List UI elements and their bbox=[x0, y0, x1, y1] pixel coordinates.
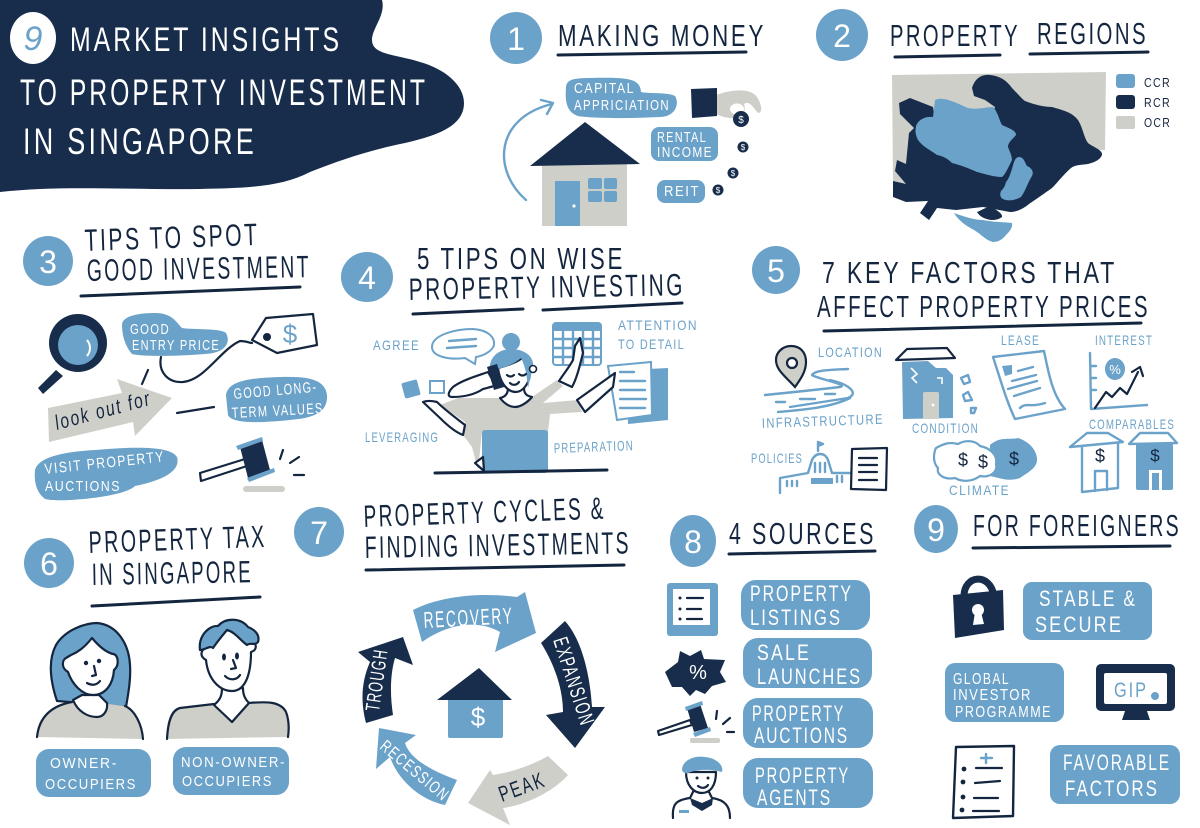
bubble: non-owner-occupiers bbox=[173, 747, 289, 795]
arrow: recession: RECESSION bbox=[376, 737, 453, 805]
money clouds: $ bbox=[958, 450, 968, 470]
panel 9: for foreigners bbox=[914, 505, 1181, 818]
panel 1: making money bbox=[490, 12, 766, 226]
badge 4: 4 bbox=[358, 260, 376, 296]
crumbling building bbox=[896, 348, 979, 436]
comparable houses bbox=[1070, 416, 1177, 492]
heading: tips to spot bbox=[81, 217, 311, 296]
heading: making money bbox=[558, 18, 766, 55]
badge 2: 2 bbox=[833, 18, 851, 54]
heading: tips to spot: TIPS TO SPOT bbox=[84, 217, 260, 258]
arrow: recession bbox=[376, 728, 457, 805]
lease document: LEASE bbox=[1001, 332, 1040, 348]
icon: GIP monitor: GIP bbox=[1114, 679, 1148, 702]
heading: property regions: PROPERTY bbox=[890, 18, 1020, 53]
bubble: stable and secure: STABLE & bbox=[1039, 586, 1137, 611]
bubble: non-owner-occupiers: OCCUPIERS bbox=[182, 773, 273, 790]
labels around figure: AGREE bbox=[373, 337, 420, 353]
location pin and roads: INFRASTRUCTURE bbox=[762, 411, 884, 431]
badge 6 bbox=[24, 538, 74, 588]
heading: property tax: IN SINGAPORE bbox=[92, 554, 253, 592]
bubble: global investor programme: PROGRAMME bbox=[955, 704, 1052, 721]
heading: property cycles: FINDING INVESTMENTS bbox=[365, 525, 631, 565]
bubble: capital appreciation: APPRICIATION bbox=[574, 97, 670, 114]
icon: percent burst bbox=[665, 650, 726, 696]
bubble: rental income: INCOME bbox=[657, 144, 713, 161]
bubble: capital appreciation: CAPITAL bbox=[574, 80, 635, 97]
bubble: good long-term values bbox=[226, 377, 327, 422]
money clouds bbox=[934, 438, 1037, 498]
bubble: property listings: LISTINGS bbox=[750, 605, 842, 630]
bubble: favorable factors: FACTORS bbox=[1065, 776, 1159, 801]
arrow: expansion: EXPANSION bbox=[548, 634, 599, 729]
heading: property tax: PROPERTY TAX bbox=[88, 519, 267, 560]
bubble: owner-occupiers bbox=[36, 749, 151, 797]
labels around figure: TO DETAIL bbox=[618, 336, 685, 352]
labels around figure: LEVERAGING bbox=[365, 429, 439, 445]
centre house with dollar: $ bbox=[471, 702, 486, 732]
policies government building: POLICIES bbox=[751, 450, 803, 466]
badge 9 bbox=[914, 505, 958, 553]
labels around figure bbox=[365, 317, 698, 456]
badge 3: 3 bbox=[39, 244, 57, 280]
icon: padlock bbox=[953, 579, 1004, 638]
bubble: favorable factors bbox=[1050, 745, 1180, 804]
heading: making money: MAKING MONEY bbox=[558, 18, 766, 53]
bubble: visit property auctions: VISIT PROPERTY bbox=[44, 448, 166, 478]
bubble: property agents: AGENTS bbox=[757, 785, 832, 810]
interest chart: % bbox=[1109, 362, 1121, 377]
icon: tablet checklist bbox=[667, 583, 718, 636]
bubble: property listings bbox=[741, 580, 870, 630]
heading: 4 sources: 4 SOURCES bbox=[729, 516, 876, 551]
location pin and roads bbox=[762, 344, 884, 431]
centre house with dollar bbox=[437, 668, 512, 738]
bubble: stable and secure: SECURE bbox=[1035, 612, 1123, 637]
arrow: recovery: RECOVERY bbox=[423, 602, 514, 633]
badge 6: 6 bbox=[40, 546, 58, 582]
badge 8: 8 bbox=[684, 524, 702, 560]
badge 9: 9 bbox=[927, 512, 945, 548]
legend: CCR bbox=[1144, 75, 1171, 90]
bubble: property auctions: PROPERTY bbox=[752, 701, 845, 726]
hand dropping coins: $ bbox=[731, 169, 736, 178]
panel 7: property cycles bbox=[294, 491, 631, 825]
hand dropping coins: $ bbox=[741, 143, 746, 152]
bubble: non-owner-occupiers: NON-OWNER- bbox=[181, 754, 286, 771]
bubble: property agents bbox=[743, 758, 873, 810]
badge 3 bbox=[23, 236, 73, 286]
panel 5: key factors affecting prices bbox=[751, 246, 1177, 498]
arrow: trough: TROUGH bbox=[362, 647, 393, 713]
panel 8: four sources bbox=[658, 515, 876, 818]
bubble: good long-term values: GOOD LONG- bbox=[233, 379, 318, 403]
panel 6: property tax bbox=[24, 519, 289, 797]
interest chart bbox=[1090, 332, 1153, 409]
arrow: look out for: look out for bbox=[52, 387, 154, 435]
title banner: MARKET INSIGHTS bbox=[70, 21, 342, 59]
squares being juggled bbox=[401, 379, 444, 399]
badge 7: 7 bbox=[310, 515, 328, 551]
icon: percent burst: % bbox=[689, 662, 707, 684]
badge 8 bbox=[670, 515, 716, 567]
icon: agent bbox=[673, 757, 730, 818]
heading: tips to spot: GOOD INVESTMENT bbox=[87, 249, 311, 288]
icon: gavel bbox=[200, 437, 304, 492]
badge 7 bbox=[294, 507, 344, 557]
price tag with string bbox=[160, 314, 317, 382]
bubble: property listings: PROPERTY bbox=[750, 581, 853, 606]
heading: 4 sources bbox=[729, 516, 876, 554]
bubble: sale launches bbox=[743, 638, 872, 689]
interest chart: INTEREST bbox=[1095, 332, 1153, 348]
bubble: good entry price: ENTRY PRICE bbox=[132, 337, 220, 354]
arrow: look out for bbox=[48, 370, 214, 442]
title banner bbox=[0, 0, 464, 192]
bubble: good entry price bbox=[122, 313, 228, 356]
panel 3: tips to spot good investment bbox=[23, 217, 327, 500]
legend bbox=[1116, 74, 1171, 130]
hand dropping coins: $ bbox=[716, 186, 721, 195]
bubble: owner-occupiers: OCCUPIERS bbox=[45, 776, 137, 793]
badge 1: 1 bbox=[507, 21, 525, 57]
hand dropping coins: $ bbox=[738, 115, 744, 126]
title banner: IN SINGAPORE bbox=[23, 121, 257, 162]
heading: 5 tips on wise: PROPERTY INVESTING bbox=[409, 267, 685, 307]
legend: OCR bbox=[1144, 115, 1171, 130]
bubble: owner-occupiers: OWNER- bbox=[50, 755, 118, 772]
bubble: global investor programme: INVESTOR bbox=[953, 687, 1032, 704]
working woman figure bbox=[423, 333, 615, 473]
location pin and roads: LOCATION bbox=[818, 344, 883, 360]
bubble: property auctions bbox=[743, 698, 873, 748]
crumbling building: CONDITION bbox=[912, 420, 979, 436]
badge 2 bbox=[816, 9, 868, 61]
badge 1 bbox=[490, 12, 542, 64]
bubble: visit property auctions bbox=[35, 448, 178, 500]
icon: GIP monitor bbox=[1096, 664, 1175, 720]
badge 4 bbox=[341, 252, 393, 302]
map of singapore regions bbox=[892, 72, 1106, 242]
heading: property cycles: PROPERTY CYCLES & bbox=[363, 491, 606, 534]
panel 4: wise property investing bbox=[341, 241, 698, 473]
bubble: good entry price: GOOD bbox=[130, 321, 170, 338]
man: non-owner-occupier bbox=[167, 620, 289, 739]
hand dropping coins bbox=[691, 88, 761, 196]
bubble: property agents: PROPERTY bbox=[755, 763, 850, 788]
legend: RCR bbox=[1144, 95, 1171, 110]
heading: property regions bbox=[890, 16, 1148, 57]
calendar bbox=[553, 323, 601, 365]
house with growth arrow bbox=[504, 100, 640, 226]
speech bubble bbox=[432, 329, 494, 364]
bubble: property auctions: AUCTIONS bbox=[754, 723, 849, 748]
bubble: visit property auctions: AUCTIONS bbox=[45, 478, 121, 495]
money clouds: $ bbox=[1009, 449, 1019, 469]
labels around figure: PREPARATION bbox=[554, 437, 634, 456]
title banner: TO PROPERTY INVESTMENT bbox=[20, 72, 428, 113]
arrow: trough bbox=[358, 637, 413, 723]
heading: 5 tips on wise bbox=[409, 241, 685, 314]
bubble: sale launches: SALE bbox=[757, 640, 811, 665]
heading: 5 tips on wise: 5 TIPS ON WISE bbox=[417, 241, 625, 276]
money clouds: $ bbox=[978, 452, 988, 472]
bubble: REIT bbox=[657, 180, 705, 203]
arrow: expansion bbox=[541, 621, 605, 748]
badge 5: 5 bbox=[767, 253, 785, 289]
woman: owner-occupier bbox=[37, 623, 143, 739]
heading: property cycles bbox=[363, 491, 631, 570]
title banner: 9 bbox=[24, 20, 43, 58]
labels around figure: ATTENTION bbox=[618, 317, 698, 333]
bubble: rental income: RENTAL bbox=[657, 129, 707, 146]
heading: property tax bbox=[88, 519, 267, 606]
documents bbox=[608, 362, 668, 424]
icon: small gavel bbox=[658, 701, 734, 743]
bubble: REIT: REIT bbox=[664, 183, 700, 200]
comparable houses: $ bbox=[1095, 446, 1105, 466]
bubble: capital appreciation bbox=[566, 78, 677, 118]
icon: magnifying glass bbox=[38, 314, 107, 394]
bubble: rental income bbox=[651, 127, 718, 161]
price tag with string: $ bbox=[283, 319, 298, 349]
arrow: peak: PEAK bbox=[495, 767, 549, 807]
bubble: stable and secure bbox=[1023, 582, 1152, 640]
bubble: good long-term values: TERM VALUES bbox=[231, 400, 324, 422]
comparable houses: $ bbox=[1150, 446, 1160, 465]
bubble: sale launches: LAUNCHES bbox=[757, 664, 862, 689]
icon: checklist document bbox=[953, 746, 1014, 818]
lease document bbox=[993, 332, 1065, 419]
arrow: recovery bbox=[413, 592, 536, 652]
badge 5 bbox=[752, 246, 800, 294]
policies government building bbox=[751, 442, 887, 493]
bubble: global investor programme bbox=[945, 663, 1064, 722]
panel 2: property regions bbox=[816, 9, 1171, 242]
heading: 7 key factors bbox=[817, 255, 1150, 331]
money clouds: CLIMATE bbox=[949, 482, 1010, 498]
arrow: peak bbox=[468, 756, 568, 825]
bubble: global investor programme: GLOBAL bbox=[953, 671, 1010, 688]
